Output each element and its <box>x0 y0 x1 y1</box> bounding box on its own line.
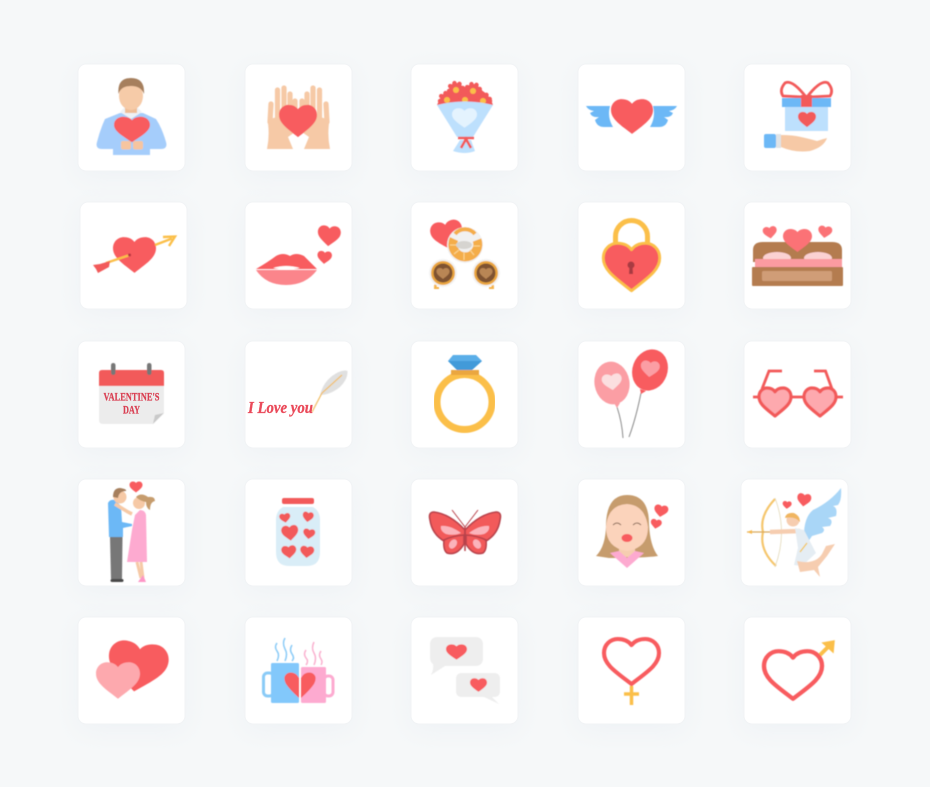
icon: butterfly <box>430 510 500 554</box>
panel: butterfly <box>411 479 518 586</box>
panel: hands holding heart <box>245 64 352 171</box>
panel: balloons <box>578 341 685 448</box>
icon: heart with arrow <box>93 236 175 273</box>
icon: lips and hearts <box>256 225 341 285</box>
panel: heart sunglasses <box>744 341 851 448</box>
panel: gift in hand <box>744 64 851 171</box>
icon: bouquet <box>437 83 493 153</box>
panel: bed with hearts <box>744 202 851 309</box>
icon: heart padlock <box>603 220 660 291</box>
handwritten text: I Love you <box>247 398 313 417</box>
panel: I love you note with feather <box>245 341 352 448</box>
icon: jar of hearts <box>276 498 320 566</box>
panel: lips and hearts <box>245 202 352 309</box>
icon: coffee and croissant <box>429 218 500 288</box>
calendar label: VALENTINE'S <box>104 392 160 404</box>
icon: girl blowing kiss <box>596 495 669 568</box>
icon: couple hugging <box>108 481 155 582</box>
icon: two hearts <box>96 638 171 699</box>
icon: cupid <box>747 488 841 577</box>
panel: male symbol heart <box>744 617 851 724</box>
panel: chat bubbles <box>411 617 518 724</box>
calendar label: DAY <box>123 404 140 416</box>
panel: two hearts <box>78 617 185 724</box>
panel: heart with arrow <box>80 202 187 309</box>
panel: bouquet <box>411 64 518 171</box>
icon: winged heart <box>586 99 677 134</box>
icon: balloons <box>591 344 674 438</box>
panel: man holding heart <box>78 64 185 171</box>
panel: heart padlock <box>578 202 685 309</box>
calendar label <box>104 392 160 416</box>
icon: gift in hand <box>764 82 832 152</box>
panel: coffee and croissant <box>411 202 518 309</box>
panel: girl blowing kiss <box>578 479 685 586</box>
icon: man holding heart <box>97 78 166 155</box>
icon: male symbol heart <box>764 641 834 699</box>
icon: heart sunglasses <box>753 371 843 416</box>
icon: feather quill <box>312 371 348 412</box>
panel: jar of hearts <box>245 479 352 586</box>
icon: diamond ring <box>437 355 492 430</box>
icon: female symbol heart <box>604 639 659 705</box>
panel: coffee mugs <box>245 617 352 724</box>
panel: female symbol heart <box>578 617 685 724</box>
panel: cupid <box>741 479 848 586</box>
icon: bed with hearts <box>752 225 843 286</box>
panel: calendar <box>78 341 185 448</box>
panel: diamond ring <box>411 341 518 448</box>
icon: calendar <box>99 363 164 424</box>
icon: hands holding heart <box>267 88 330 149</box>
panel: winged heart <box>578 64 685 171</box>
panel: couple hugging <box>78 479 185 586</box>
icon: coffee mugs <box>264 638 333 703</box>
icon: chat bubbles <box>430 637 500 704</box>
